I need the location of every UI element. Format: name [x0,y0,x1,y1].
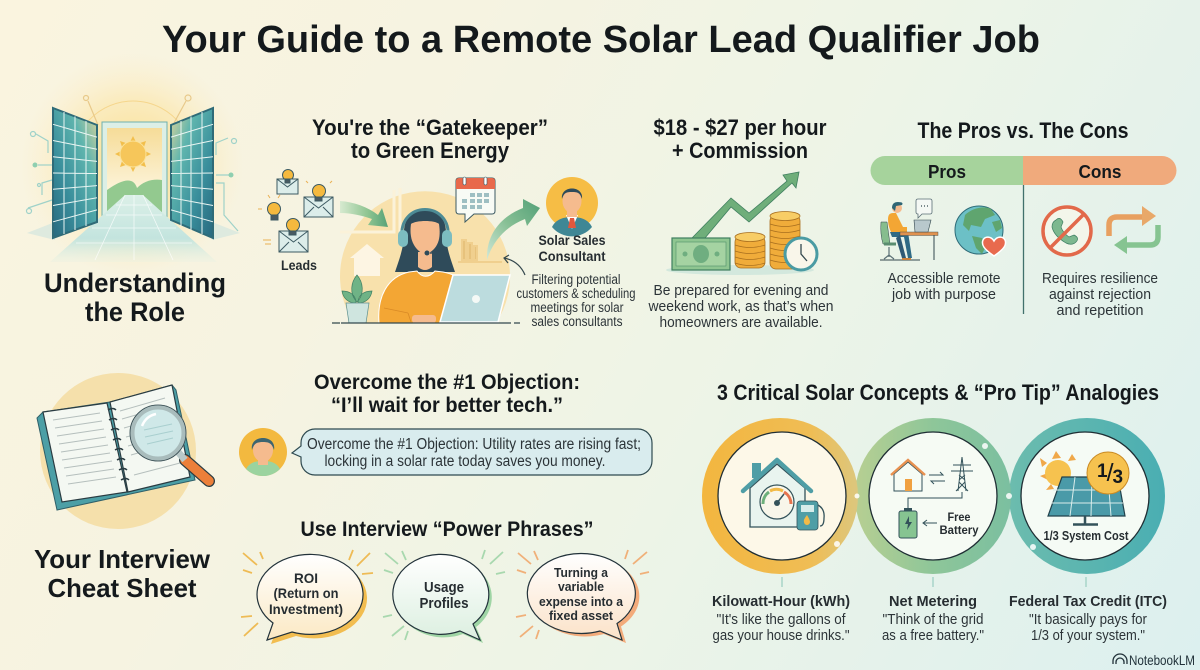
icon: repetition arrows [1109,206,1158,254]
text: pros description: job with purpose [891,287,996,303]
heading: interview cheat sheet: Your Interview [34,544,211,574]
icon: speaker avatar [239,428,287,476]
speech bubble: variable expense: fixed asset [549,608,614,623]
text: pros description: Accessible remote [888,271,1000,287]
text: kilowatt-hour analogy: gas your house drinks." [712,628,850,644]
clock [785,238,817,270]
speech bubble: objection response [292,429,652,475]
text: filtering description: sales consultants [532,314,623,329]
panel: interview cheat sheet [34,373,211,603]
arrow: agent to consultant [487,199,540,260]
icon: leads envelopes and bulbs [258,170,333,252]
panel: pay [648,115,834,331]
text: cons description: Requires resilience [1042,271,1158,287]
text: filtering description: customers & scheduling [516,286,636,301]
illustration: agent at laptop [332,188,520,323]
cons header [1023,156,1176,185]
icon: sun, solar panel, one third coin: 3 [1113,467,1123,488]
panel: objection [239,371,652,476]
agent body [379,271,463,323]
heading: pay [654,115,827,163]
laptop [440,275,510,322]
heading: objection: Overcome the #1 Objection: [314,371,580,394]
icon: money, coins, chart arrow, clock [666,172,817,275]
speech bubble: usage profiles: Profiles [420,596,468,612]
speech bubble: objection response: Overcome the #1 Objection: Utility rates are rising fast; [307,436,641,453]
icon: solar panel doorway [21,53,245,277]
text: tax credit analogy: 1/3 of your system." [1031,628,1145,644]
text: filtering description: meetings for solar [530,300,624,315]
concept circle: net metering [869,432,997,560]
text: net metering analogy [882,593,984,644]
plant [342,275,372,323]
concept circle: federal tax credit [1021,432,1149,560]
heading: gatekeeper: to Green Energy [351,138,510,163]
icon: no phone [1043,207,1091,255]
text: tax credit analogy: "It basically pays for [1029,612,1147,628]
speech bubble: ROI: ROI [294,570,318,586]
heading: gatekeeper: You're the “Gatekeeper” [312,115,548,140]
icon: sun, solar panel, one third coin [1040,451,1129,524]
label: leads: Leads [281,258,317,273]
agent hair [395,210,455,272]
label: free battery: Free [948,510,971,524]
speech bubble: variable expense [516,550,649,643]
panel: power phrases [241,518,649,644]
text: net metering analogy: as a free battery." [882,628,984,644]
icon: house, grid tower, battery [891,457,973,538]
text: net metering analogy: Net Metering [889,593,977,610]
text: evening and weekend note: Be prepared for evening and [654,283,828,299]
heading: interview cheat sheet: Cheat Sheet [48,573,197,603]
headset [398,210,452,256]
pros header [870,156,1023,185]
text: net metering analogy: "Think of the grid [882,612,984,628]
text: pros description [888,271,1000,303]
heading: gatekeeper [312,115,548,163]
icon: calendar [456,177,495,222]
right solar panel [171,108,213,238]
speech bubble: ROI: Investment) [269,601,343,617]
label: free battery: Battery [940,523,979,537]
arrow: leads to agent [340,201,388,227]
agent face [411,221,440,255]
heading: interview cheat sheet [34,544,211,603]
heading: understanding the role [44,268,226,327]
speech bubble: usage profiles [383,550,505,643]
speech bubble: variable expense: expense into a [539,594,624,609]
text: kilowatt-hour analogy: "It's like the gallons of [716,612,846,628]
label: solar sales consultant [538,232,606,264]
heading: solar concepts: 3 Critical Solar Concepts & “Pro Tip” Analogies [717,380,1159,405]
growth arrow [692,172,799,238]
concept rings [702,418,1165,587]
heading: objection: “I’ll wait for better tech.” [331,394,563,417]
text: cons description: against rejection [1049,287,1151,303]
heading: understanding the role: the Role [85,297,185,327]
road [50,195,217,262]
heading: objection [314,371,580,417]
icon: globe with heart [955,206,1006,256]
icon: sun [115,136,151,172]
heading: pay: + Commission [672,138,808,163]
panel: pros vs cons [870,118,1176,319]
panel: gatekeeper [258,115,636,329]
title: Your Guide to a Remote Solar Lead Qualifier Job [162,19,1040,61]
text: filtering description [516,272,636,329]
label: solar sales consultant: Consultant [538,248,606,264]
heading: understanding the role: Understanding [44,268,226,298]
heading: pros vs cons: The Pros vs. The Cons [918,118,1128,143]
speech bubble: variable expense: Turning a [554,565,609,580]
text: kilowatt-hour analogy [712,593,850,644]
coin stacks [735,212,800,269]
icon: house with gauge and fuel pump [743,460,824,530]
text: evening and weekend note: weekend work, as that’s when [648,299,834,315]
text: filtering description: Filtering potential [532,272,620,287]
icon: solar sales consultant avatar [546,177,598,236]
icon: sun, solar panel, one third coin: 1 [1097,461,1108,482]
icon: remote worker at desk [880,199,938,260]
speech bubble: ROI [241,550,373,644]
callout arrow [504,255,525,275]
panel: solar concepts [702,380,1167,644]
pros header: Pros [928,162,966,182]
banknote [672,238,730,270]
speech bubble: ROI: (Return on [274,585,338,601]
text: kilowatt-hour analogy: Kilowatt-Hour (kWh) [712,593,850,610]
text: cons description: and repetition [1056,303,1144,319]
heading: power phrases: Use Interview “Power Phrases” [300,518,594,541]
heading: pay: $18 - $27 per hour [654,115,827,140]
text: evening and weekend note [648,283,834,331]
speech bubble: objection response: locking in a solar rate today saves you money. [324,453,606,470]
icon: notebook and magnifier [37,373,209,529]
concept circle: kilowatt-hour [718,432,846,560]
left solar panel [53,108,97,238]
text: evening and weekend note: homeowners are available. [660,315,822,331]
icon: sun, solar panel, one third coin: / [1107,459,1114,487]
label: free battery [940,510,979,537]
label: solar sales consultant: Solar Sales [538,232,606,248]
speech bubble: usage profiles: Usage [424,580,464,596]
text: tax credit analogy [1009,593,1167,644]
text: tax credit analogy: Federal Tax Credit (ITC) [1009,593,1167,610]
backdrop circle [340,191,510,323]
text: cons description [1042,271,1158,319]
label: one third system cost: 1/3 System Cost [1044,528,1129,543]
magnifier [130,405,209,481]
speech bubble: variable expense: variable [558,579,604,594]
cons header: Cons [1078,162,1122,182]
panel: understanding the role [21,53,245,327]
